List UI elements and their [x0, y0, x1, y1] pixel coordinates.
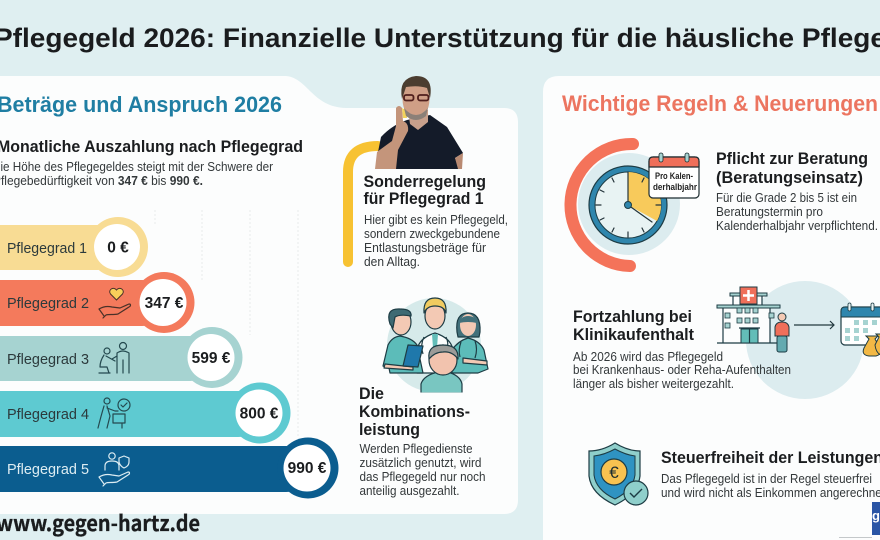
text block: Kombinationsleistung: leistung	[359, 421, 420, 439]
text block: Fortzahlung: länger als bisher weitergezahlt.	[573, 377, 734, 391]
text block: Pflicht zur Beratung: Beratungstermin pro	[716, 205, 823, 219]
icon: person in hand with shield	[99, 453, 130, 486]
panel: Beträge und Anspruch	[0, 76, 518, 514]
doctor	[417, 333, 453, 373]
bar: Pflegegrad 5	[0, 438, 338, 498]
bar: Pflegegrad 5: 990 €	[288, 460, 327, 477]
text block: Sonderregelung: für Pflegegrad 1	[364, 190, 484, 208]
text block: Kombinationsleistung: Werden Pflegedienste	[360, 442, 473, 456]
text block: Sonderregelung: den Alltag.	[364, 255, 420, 269]
accent arc: yellow	[348, 146, 378, 262]
text block: Pflicht zur Beratung	[716, 150, 878, 233]
bar: Pflegegrad 3	[0, 327, 242, 388]
bar: Pflegegrad 4: Pflegegrad 4	[7, 407, 89, 423]
illustration: hospital to calendar	[717, 281, 880, 399]
text block: Sonderregelung: sondern zweckgebundene	[364, 227, 500, 241]
icon: shield with euro	[589, 443, 648, 505]
patient	[421, 371, 462, 393]
text block: Fortzahlung: Ab 2026 wird das Pflegegeld	[573, 350, 723, 364]
icon: person with wheelchair	[98, 398, 130, 428]
icon: person	[775, 313, 789, 352]
text block: Sonderregelung: Sonderregelung	[364, 173, 486, 191]
nurse right	[457, 313, 480, 337]
website: www.gegen-hartz.de	[0, 507, 200, 538]
portrait: man pointing	[375, 76, 463, 169]
bar: Pflegegrad 1	[0, 217, 148, 277]
bar: Pflegegrad 3: 599 €	[192, 350, 231, 367]
text block: Sonderregelung: Hier gibt es kein Pflegegeld,	[364, 213, 508, 227]
text block: Fortzahlung: Fortzahlung bei	[573, 308, 692, 326]
nurse left	[383, 336, 423, 373]
bar: Pflegegrad 4	[0, 382, 290, 444]
arrow	[794, 321, 834, 329]
icon: calendar: Pro Kalen-	[655, 171, 693, 181]
text block: Kombinationsleistung: Kombinations-	[359, 403, 470, 421]
subheading: Monatliche Auszahlung nach Pflegegrad	[0, 138, 303, 156]
illustration: care team	[383, 298, 488, 393]
icon: shield with euro: €	[609, 463, 619, 482]
text block: Sonderregelung: Entlastungsbeträge für	[364, 241, 486, 255]
text block: Kombinationsleistung	[359, 385, 486, 498]
text block: Pflicht zur Beratung: (Beratungseinsatz)	[716, 169, 863, 187]
bar: Pflegegrad 4: 800 €	[240, 406, 279, 422]
icon: heart on hand	[99, 288, 130, 318]
text block: Kombinationsleistung: das Pflegegeld nur noch	[360, 470, 486, 484]
title: Pflegegeld 2026: Finanzielle Unterstützung für die häusliche Pflege	[0, 23, 880, 53]
text block: Kombinationsleistung: Die	[359, 385, 384, 403]
text block: Sonderregelung	[364, 173, 508, 269]
panel heading: Wichtige Regeln & Neuerungen	[562, 91, 878, 116]
logo badge: g	[872, 508, 880, 523]
text block: Fortzahlung	[573, 308, 791, 391]
intro text: Die Höhe des Pflegegeldes steigt mit der Schwere der	[0, 160, 273, 174]
bar: Pflegegrad 5: Pflegegrad 5	[7, 462, 89, 478]
icon: carer with kneeling person	[99, 342, 129, 373]
text block: Kombinationsleistung: anteilig ausgezahlt.	[360, 484, 460, 498]
bar chart: Pflegegrad	[0, 217, 338, 498]
panel heading: Beträge und Anspruch 2026	[0, 92, 282, 117]
text block: Fortzahlung: bei Krankenhaus- oder Reha-Aufenthalten	[573, 363, 791, 377]
intro text	[0, 160, 273, 188]
text block: Pflicht zur Beratung: Pflicht zur Beratung	[716, 150, 868, 168]
panel: Wichtige Regeln	[543, 76, 880, 540]
icon: calendar: derhalbjahr	[653, 182, 697, 192]
text block: Kombinationsleistung: zusätzlich genutzt, wird	[360, 456, 482, 470]
icon: calendar	[649, 153, 699, 198]
bar: Pflegegrad 1: 0 €	[107, 240, 129, 256]
text block: Steuerfreiheit	[661, 449, 880, 500]
bar: Pflegegrad 1: Pflegegrad 1	[7, 241, 87, 257]
logo badge	[839, 502, 880, 538]
bar: Pflegegrad 2: 347 €	[145, 295, 184, 312]
bar: Pflegegrad 3: Pflegegrad 3	[7, 352, 89, 368]
icon: hospital	[717, 287, 780, 343]
illustration: clock with calendar	[570, 144, 699, 266]
icon: calendar with money	[841, 303, 880, 356]
text block: Fortzahlung: Klinikaufenthalt	[573, 326, 694, 344]
bar: Pflegegrad 2	[0, 272, 194, 333]
bar: Pflegegrad 2: Pflegegrad 2	[7, 296, 89, 312]
text block: Pflicht zur Beratung: Für die Grade 2 bis 5 ist ein	[716, 191, 857, 205]
